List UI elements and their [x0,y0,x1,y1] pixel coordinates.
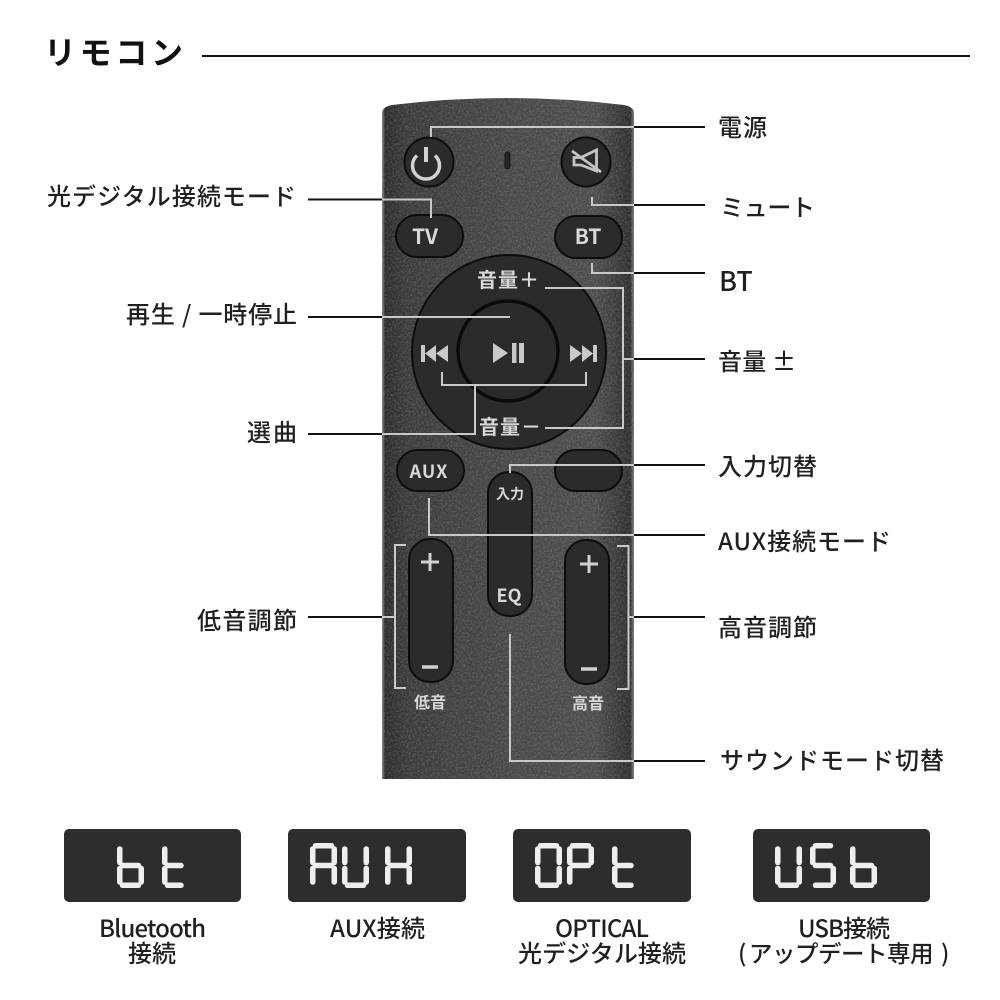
mute button [562,138,610,186]
input and EQ rocker: EQ [497,582,522,608]
AUX button [397,450,464,491]
label: treble: 高音調節 [718,608,817,643]
label: optical mode: 光デジタル接続モード [47,177,296,212]
previous icon [421,345,448,362]
input and EQ rocker [488,472,532,616]
navigation dial [412,255,606,449]
caption: USB: アップデート専用 [749,935,933,969]
LCD: AUX [288,829,466,902]
label: mute: ミュート [720,188,815,223]
leader: volume [545,288,705,428]
leader: track select [308,372,586,434]
leader: sound mode [510,634,705,761]
TV button [396,215,463,257]
caption: USB: USB接続 [798,909,890,944]
leader: input [510,465,705,473]
leader: bass [308,545,406,688]
treble label: 高音 [572,690,604,714]
label: bass: 低音調節 [197,601,297,636]
remote control [382,95,634,779]
caption: optical: 光デジタル接続 [518,934,686,969]
label: play pause: 再生 / 一時停止 [126,295,297,330]
caption: optical: OPTICAL [555,909,649,944]
input and EQ rocker: 入力 [496,484,524,504]
LCD: OPt [513,829,691,902]
caption: optical [518,909,686,969]
bass label: 低音 [414,689,446,713]
caption: USB: ) [941,935,949,969]
title: リモコン [44,28,183,74]
caption: Bluetooth: Bluetooth [99,909,206,944]
remote body [382,95,634,779]
label: volume: 音量 ± [718,342,796,377]
bass rocker [409,539,453,682]
blank button [555,450,622,491]
next icon [570,345,597,362]
label: BT: BT [719,260,753,299]
label: input switch: 入力切替 [718,447,817,482]
leader: AUX [429,498,705,535]
leader: play pause [308,316,510,318]
label: power: 電源 [718,108,767,143]
play pause icon [493,343,524,363]
leader: mute [592,197,705,205]
volume up label: 音量＋ [477,264,539,293]
leader: power [431,127,705,137]
BT button [555,216,622,258]
label: AUX mode: AUX接続モード [718,522,891,557]
caption: Bluetooth: 接続 [128,934,176,969]
TV button: TV [412,221,439,251]
caption: USB: ( [738,935,746,969]
label: sound mode: サウンドモード切替 [720,741,944,776]
BT button: BT [575,221,601,251]
volume down label: 音量－ [479,411,541,440]
LCD: bt [64,829,241,902]
leader: treble [617,546,705,689]
LCD: USb [753,829,930,902]
caption: AUX: AUX接続 [330,909,425,944]
label: track select: 選曲 [247,413,297,448]
indicator light [505,152,510,169]
caption: Bluetooth [99,909,206,969]
leader: BT [592,263,705,273]
caption: USB [738,909,949,969]
treble rocker [565,540,609,684]
title rule [202,55,970,57]
leader: optical mode [308,200,431,218]
power button [404,138,454,186]
AUX button: AUX [409,458,448,484]
